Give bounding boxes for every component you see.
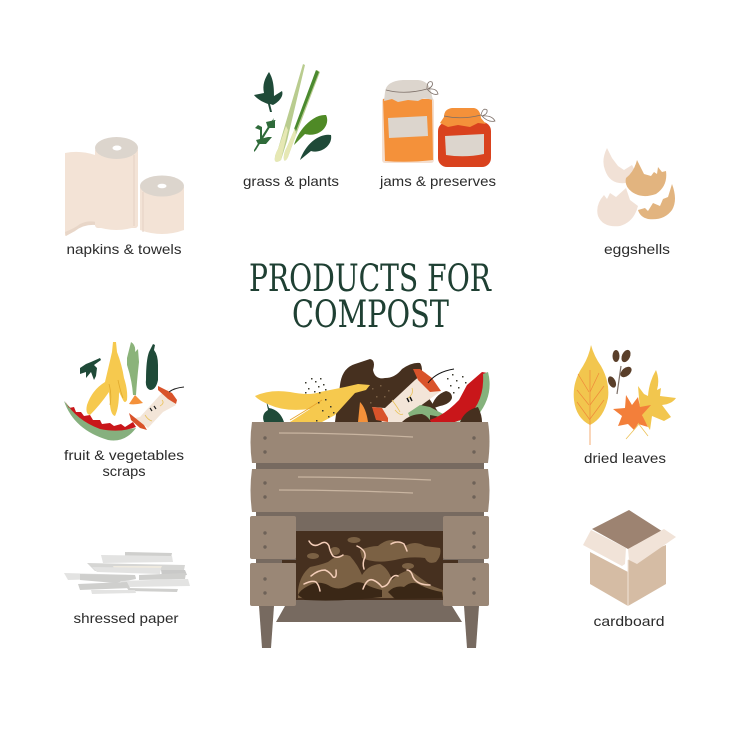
bin legs and tray	[259, 606, 479, 648]
icon: cardboard box	[583, 510, 676, 606]
icon: dried leaves	[574, 345, 676, 445]
bin back panel	[256, 463, 484, 606]
label: scraps continued: scraps	[102, 463, 146, 479]
compost bin	[250, 359, 490, 648]
icon: napkins and towels	[65, 137, 184, 236]
label: grass and plants: grass & plants	[243, 173, 339, 189]
label: jams and preserves: jams & preserves	[379, 173, 496, 189]
upper bin board	[250, 422, 490, 463]
title: PRODUCTS FOR	[249, 257, 492, 300]
title: COMPOST	[292, 293, 449, 336]
label: napkins and towels: napkins & towels	[66, 241, 182, 257]
label: shredded paper: shressed paper	[74, 610, 179, 626]
title	[249, 257, 492, 336]
compost window with worms	[282, 531, 458, 601]
icon: eggshells	[597, 148, 675, 226]
label: cardboard: cardboard	[594, 613, 664, 629]
left side boards	[250, 516, 296, 606]
icon: jams and preserves	[382, 80, 495, 167]
right side boards	[443, 516, 489, 606]
pile of scraps	[255, 359, 490, 422]
label: fruit and vegetables scraps: fruit & vegetables	[64, 447, 184, 463]
icon: fruit and vegetable scraps	[64, 342, 184, 440]
second bin board	[250, 469, 490, 512]
icon: grass and plants	[254, 64, 331, 162]
label: dried leaves: dried leaves	[584, 450, 666, 466]
label: eggshells: eggshells	[604, 241, 670, 257]
icon: shredded paper	[64, 552, 190, 594]
